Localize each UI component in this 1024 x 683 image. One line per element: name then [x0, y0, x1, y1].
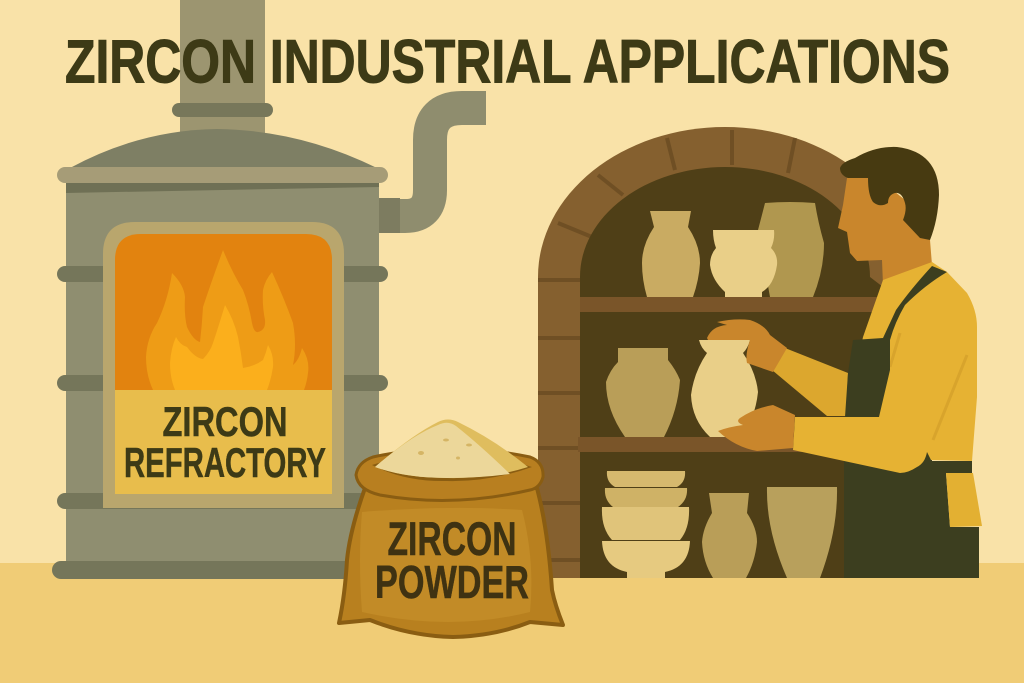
- apron tail: [946, 473, 982, 527]
- torso and sleeve: [793, 262, 977, 473]
- pottery kiln and shelves: [538, 127, 912, 578]
- furnace: [52, 0, 486, 579]
- shirt folds: [890, 333, 967, 440]
- lower hand: [718, 405, 795, 451]
- furnace door frame: [103, 222, 344, 508]
- flame inner: [170, 305, 273, 390]
- sack opening: [372, 453, 532, 481]
- pot top front: [710, 230, 777, 297]
- pot top back: [758, 202, 824, 297]
- chimney: [172, 0, 273, 135]
- sack label: [375, 512, 529, 608]
- fire window: [115, 234, 332, 390]
- zircon powder sack: [339, 420, 563, 637]
- pot middle left: [606, 348, 680, 437]
- sack body: [339, 488, 563, 637]
- brick arch: [538, 127, 912, 578]
- floor: [0, 563, 1024, 683]
- potter figure: [707, 147, 982, 578]
- pots: [602, 202, 837, 578]
- hair: [840, 147, 939, 240]
- sack light patch: [360, 508, 531, 622]
- tall cup bottom: [767, 487, 837, 578]
- powder pile: [375, 420, 528, 478]
- arch bricks: [538, 130, 795, 560]
- refractory label: ZIRCON: [162, 398, 288, 445]
- side pipe: [379, 108, 486, 233]
- stacked bowls: [602, 471, 690, 578]
- refractory label: REFRACTORY: [124, 439, 326, 486]
- arch interior: [580, 167, 900, 578]
- shelves: [578, 297, 890, 452]
- flame outer: [146, 250, 308, 390]
- pot top left: [642, 211, 700, 297]
- apron bib and strap: [845, 266, 947, 417]
- held pot: [691, 340, 758, 437]
- sack rim: [356, 448, 543, 500]
- upper hand: [707, 319, 787, 372]
- sack label: ZIRCON: [388, 512, 516, 565]
- furnace dome: [70, 129, 377, 168]
- vase bottom: [702, 493, 757, 578]
- sack label: POWDER: [375, 556, 529, 608]
- forearm upper sleeve: [772, 348, 848, 416]
- refractory label: [115, 390, 332, 494]
- neck and face: [838, 170, 932, 285]
- furnace bands: [52, 266, 388, 579]
- apron lower: [844, 440, 979, 578]
- furnace body: [66, 180, 379, 565]
